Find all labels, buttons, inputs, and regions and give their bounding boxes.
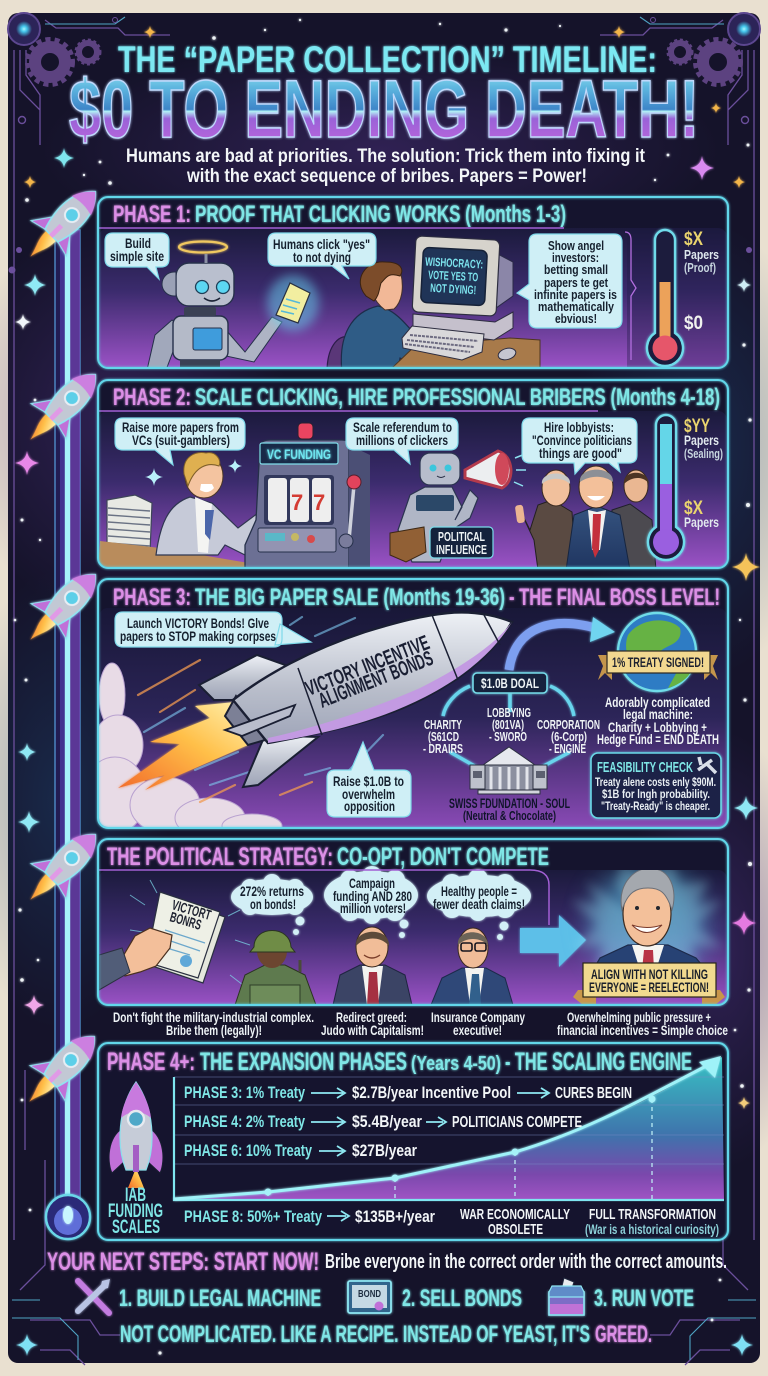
captions: political strategy: Redirect greed: <box>336 1009 407 1025</box>
rocket marker: political strategy <box>13 817 113 917</box>
heading: phase 2: PHASE 2: <box>113 384 191 411</box>
row: phase 4 <box>184 1112 582 1131</box>
icon: tools <box>78 1279 110 1313</box>
box: goal <box>473 673 547 693</box>
closing line: GREED. <box>595 1321 652 1348</box>
label: war obsolete: OBSOLETE <box>488 1221 543 1238</box>
heading: phase 4+ <box>107 1048 692 1076</box>
subtitle: with the exact sequence of bribes. Papers = Power! <box>186 166 587 187</box>
icon: ballot box <box>549 1278 584 1315</box>
row: phase 4: $5.4B/year <box>352 1112 422 1131</box>
heading: phase 1: PHASE 1: <box>113 201 191 228</box>
thermometer labels: phase 1: $0 <box>684 313 703 334</box>
icon: slot machine: 7 <box>291 490 303 515</box>
box: goal: $1.0B DOAL <box>481 675 539 691</box>
speech bubble: raise 1.0B <box>327 742 411 817</box>
heading: phase 4+: (Years 4-50) <box>411 1053 501 1075</box>
icon: hand with victory bonds: VICTORT <box>170 897 213 923</box>
panel: phase 1 <box>98 197 728 372</box>
speech bubble: build simple site: simple site <box>110 249 164 264</box>
callout: feasibility check: $1B for lngh probability. <box>602 787 710 801</box>
panel: political strategy <box>98 839 728 1006</box>
speech bubble: humans click yes: to not dying <box>293 250 351 265</box>
subtitle <box>126 146 646 187</box>
captions: political strategy: Insurance Company <box>431 1009 525 1025</box>
heading: phase 1: PROOF THAT CLICKING WORKS (Months 1-3) <box>195 201 566 228</box>
org labels: (S61CD <box>428 729 459 744</box>
icon: swiss foundation building <box>470 747 547 794</box>
icon: bond rocket: ALIGNMENT BONDS <box>315 647 436 713</box>
label box: political influence: POLITICAL <box>438 529 485 544</box>
captions: political strategy: Judo with Capitalism! <box>321 1022 424 1038</box>
row: phase 4: POLITICIANS COMPETE <box>452 1114 582 1131</box>
label: IAB funding scales: SCALES <box>112 1217 160 1238</box>
org labels: CHARITY <box>424 717 462 732</box>
speech bubble: hire lobbyists: Hire lobbyists: <box>544 420 614 435</box>
speech bubble: show angel investors: Show angel <box>548 238 604 253</box>
captions: political strategy: Bribe them (legally)! <box>166 1022 262 1038</box>
icon: politician <box>333 927 412 1005</box>
legal machine text: Adorably complicated <box>605 694 710 710</box>
icon: paper stack <box>106 494 152 547</box>
label: full transformation: FULL TRANSFORMATION <box>589 1206 716 1223</box>
thermometer labels: phase 1: $X <box>684 229 703 250</box>
icon: insurance executive <box>431 928 513 1005</box>
org labels: LOBBYING <box>487 705 531 720</box>
rocket marker: phase 1 <box>13 174 113 274</box>
speech bubble: humans click yes: Humans click "yes" <box>273 237 370 252</box>
thought bubble: campaign funding: Campaign <box>349 875 395 891</box>
icon: robot with megaphone <box>390 451 526 562</box>
banner: treaty signed <box>598 651 718 680</box>
icon: hand with victory bonds <box>99 880 250 990</box>
icon: man in silver suit <box>145 452 256 556</box>
icon: retro computer: VOTE YES TO <box>428 268 479 284</box>
icon: hand with victory bonds: BONRS <box>168 909 203 933</box>
icon: big candidate <box>596 870 700 962</box>
org labels: (801VA) <box>492 717 524 732</box>
foundation caption <box>449 798 570 822</box>
org labels: (6-Corp) <box>551 729 587 744</box>
speech bubble: raise more papers <box>115 418 245 465</box>
label: IAB funding scales <box>108 1185 163 1238</box>
next steps heading: YOUR NEXT STEPS: START NOW! <box>47 1248 319 1276</box>
gears top right <box>668 40 740 84</box>
speech bubble: show angel investors <box>517 234 622 328</box>
bracket <box>625 232 636 360</box>
heading: political strategy: CO-OPT, DON'T COMPETE <box>337 843 549 871</box>
icon: three lobbyists <box>515 466 656 570</box>
row: phase 3 <box>184 1083 632 1102</box>
thermometer: phase 2 <box>648 415 684 560</box>
streaks <box>138 617 383 802</box>
org labels <box>423 708 600 753</box>
foundation caption: SWISS FDUNDATION - SOUL <box>449 795 570 811</box>
row: phase 4: PHASE 4: 2% Treaty <box>184 1112 305 1131</box>
thought bubble: 272% returns: 272% returns <box>240 883 304 899</box>
connector tree <box>443 686 574 768</box>
speech bubble: raise more papers: Raise more papers from <box>122 420 239 435</box>
speech bubble: hire lobbyists <box>522 418 637 474</box>
speech bubble: show angel investors: infinite papers is <box>534 287 617 302</box>
icon: bond rocket: VICTORY INCENTIVE <box>302 631 433 701</box>
speech bubble: show angel investors: investors: <box>552 250 599 265</box>
icon: retro computer: WISHOCRACY: <box>425 254 484 272</box>
speech bubble: raise 1.0B: Raise $1.0B to <box>333 773 404 789</box>
row: phase 3: PHASE 3: 1% Treaty <box>184 1083 305 1102</box>
org labels: CORPORATION <box>537 717 600 732</box>
icon: slot machine: 7 <box>313 490 325 515</box>
legal machine text <box>597 694 719 747</box>
icon: robot with halo <box>147 242 282 370</box>
speech bubble: build simple site <box>105 233 169 279</box>
speech bubble: show angel investors: mathematically <box>538 299 615 314</box>
icon: IAB rocket <box>109 1082 163 1188</box>
icon: bond certificate <box>348 1281 391 1313</box>
chart: scaling curve <box>174 1056 724 1200</box>
thought bubble: healthy people <box>427 869 531 940</box>
icon: globe <box>618 613 696 691</box>
speech bubble: raise 1.0B: overwhelm <box>342 786 395 802</box>
thermometer labels: phase 2: $X <box>684 498 703 519</box>
big arrow <box>520 915 586 967</box>
org labels: - ENGINE <box>549 741 586 756</box>
panel: phase 3 <box>83 579 728 838</box>
icon: retro computer <box>392 236 540 368</box>
thought bubble: campaign funding: funding AND 280 <box>333 888 412 904</box>
next steps heading <box>47 1248 727 1276</box>
thermometer labels: phase 2: $YY <box>684 416 710 437</box>
clouds <box>99 662 282 827</box>
speech bubble: launch victory bonds: Launch VICTORY Bonds! Glve <box>127 615 269 631</box>
speech bubble: hire lobbyists: "Convince politicians <box>532 433 632 448</box>
callout: feasibility check: "Treaty-Ready" is cheaper. <box>601 799 710 813</box>
arrow to globe <box>509 623 602 670</box>
icon: soldier <box>235 930 316 1005</box>
panel: phase 2 <box>98 380 728 570</box>
callout: feasibility check: FEASIBILITY CHECK <box>597 759 693 776</box>
row: phase 3: CURES BEGIN <box>555 1085 632 1102</box>
thermometer labels: phase 2 <box>684 416 723 530</box>
rocket marker: phase 3 <box>13 557 113 657</box>
row: phase 3: $2.7B/year Incentive Pool <box>352 1083 511 1102</box>
legal machine text: legal machine: <box>623 706 693 722</box>
speech bubble: raise more papers: VCs (suit-gamblers) <box>132 433 230 448</box>
heading: phase 3: THE BIG PAPER SALE (Months 19-36) <box>195 584 505 611</box>
step 2: 2. SELL BONDS <box>402 1285 522 1312</box>
label: full transformation <box>585 1206 719 1237</box>
label: IAB funding scales: FUNDING <box>108 1201 163 1222</box>
captions: political strategy <box>113 1009 728 1038</box>
callout: feasibility check: Treaty alene costs enly $90M. <box>595 775 716 789</box>
icon: glowing paper <box>267 275 319 331</box>
thought bubble: campaign funding <box>324 866 418 938</box>
panel: expansion phases <box>98 1043 728 1240</box>
legal machine text: Charity + Lobbying + <box>608 719 707 735</box>
subtitle: Humans are bad at priorities. The solution: Trick them into fixing it <box>126 146 646 167</box>
thermometer labels: phase 2: Papers <box>684 514 719 530</box>
thermometer labels: phase 2: Papers <box>684 432 719 448</box>
speech bubble: scale referendum: Scale referendum to <box>353 420 452 435</box>
org labels: - DRAIRS <box>423 741 463 756</box>
icon: person at computer <box>326 261 410 367</box>
heading: political strategy: THE POLITICAL STRATEGY: <box>107 843 333 871</box>
heading: phase 4+: PHASE 4+: <box>107 1048 195 1076</box>
foundation caption: (Neutral & Chocolate) <box>463 808 556 823</box>
speech bubble: hire lobbyists: things are good" <box>539 446 622 461</box>
banner: align with not killing <box>573 963 725 1005</box>
heading: phase 4+: THE EXPANSION PHASES <box>200 1048 407 1076</box>
row: phase 6: $27B/year <box>352 1141 417 1160</box>
row: phase 8: $135B+/year <box>355 1207 435 1226</box>
timeline tube <box>46 230 90 1239</box>
speech bubble: show angel investors: ebvious! <box>555 311 597 326</box>
heading: phase 1 <box>113 201 566 228</box>
icon: bond rocket <box>199 612 512 787</box>
speech bubble: show angel investors: papers te get <box>544 275 609 290</box>
gears top left <box>28 40 100 84</box>
icon: slot machine <box>245 423 370 568</box>
thermometer: phase 1 <box>647 230 683 366</box>
row: phase 8: PHASE 8: 50%+ Treaty <box>184 1207 322 1226</box>
row: phase 6: PHASE 6: 10% Treaty <box>184 1141 312 1160</box>
thermometer labels: phase 1: Papers <box>684 247 719 262</box>
arrow head <box>590 617 615 642</box>
icon: retro computer: NOT DYING! <box>430 281 477 297</box>
banner: align with not killing: ALIGN WITH NOT KILLING <box>591 966 708 982</box>
thought bubble: 272% returns <box>231 874 313 935</box>
icon: bond certificate: BOND <box>358 1289 381 1300</box>
callout: feasibility check <box>591 753 721 818</box>
captions: political strategy: executive! <box>453 1022 502 1038</box>
rocket marker: phase 2 <box>13 357 113 457</box>
speech bubble: launch victory bonds: papers to STOP making corpses <box>120 628 276 644</box>
thought bubble: 272% returns: on bonds! <box>250 896 296 912</box>
label box: political influence: INFLUENCE <box>436 542 487 557</box>
label: IAB funding scales: IAB <box>125 1185 146 1206</box>
thermometer labels: phase 1 <box>684 229 719 334</box>
thermometer labels: phase 1: (Proof) <box>684 261 716 275</box>
speech bubble: humans click yes <box>268 233 376 279</box>
speech bubble: scale referendum: millions of clickers <box>356 433 448 448</box>
rays and glow behind candidate <box>570 870 724 962</box>
step 1: 1. BUILD LEGAL MACHINE <box>119 1285 321 1312</box>
org labels: - SWORO <box>489 729 527 744</box>
thought bubble: healthy people: Healthy people = <box>441 883 517 899</box>
speech bubble: raise 1.0B: opposition <box>344 798 395 814</box>
thought bubble: healthy people: fewer death claims! <box>433 896 525 912</box>
desk <box>99 541 244 567</box>
thought bubble: campaign funding: million voters! <box>340 900 406 916</box>
icon: slot machine: VC FUNDING <box>267 446 331 462</box>
captions: political strategy: Don't fight the military-industrial complex. <box>113 1009 314 1025</box>
thermometer labels: phase 2: (Sealing) <box>684 447 723 461</box>
label: war obsolete: WAR ECONOMICALLY <box>460 1206 570 1223</box>
banner: treaty signed: 1% TREATY SIGNED! <box>612 655 704 670</box>
flame <box>118 702 248 790</box>
speech bubble: build simple site: Build <box>125 236 151 251</box>
label: war obsolete <box>460 1206 570 1238</box>
heading: phase 3: PHASE 3: <box>113 584 191 611</box>
speech bubble: show angel investors: betting small <box>544 262 608 277</box>
rocket marker: phase 4+ <box>12 1019 112 1119</box>
speech bubble: scale referendum <box>346 418 458 464</box>
step 3: 3. RUN VOTE <box>594 1285 694 1312</box>
speech bubble: launch victory bonds <box>115 612 311 647</box>
label box: political influence <box>430 527 493 558</box>
